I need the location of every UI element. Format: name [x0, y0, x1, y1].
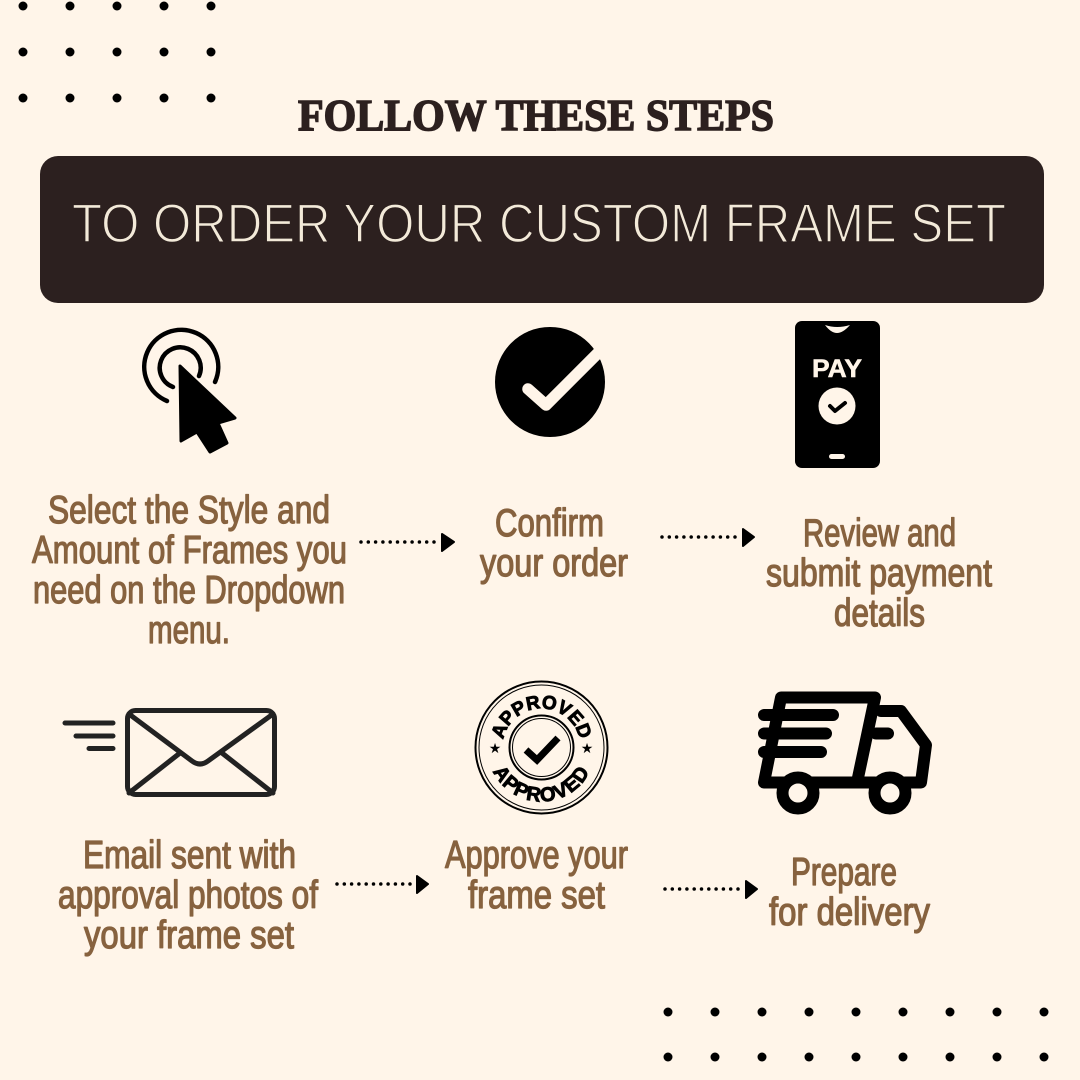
- icon: phone pay: PAY: [812, 355, 862, 383]
- icon: phone pay: [795, 321, 880, 468]
- text: step 6: [769, 851, 930, 934]
- text: step 6: Prepare: [791, 851, 897, 894]
- text: step 3: Review and: [803, 512, 956, 555]
- text: step 5: Approve your: [445, 834, 628, 877]
- icon: email envelope: [65, 710, 274, 794]
- text: step 2: [480, 502, 628, 585]
- text: step 1: [32, 489, 347, 652]
- text: step 2: Confirm: [495, 502, 604, 545]
- icon: cursor click: [144, 330, 235, 452]
- text: step 3: details: [834, 592, 925, 635]
- arrow: step 2 to 3: [662, 529, 754, 546]
- text: step 3: [766, 512, 992, 635]
- text: step 5: frame set: [468, 874, 605, 917]
- arrow: step 1 to 2: [361, 534, 454, 551]
- title: FOLLOW THESE STEPS: [298, 91, 774, 140]
- icon: approved stamp: ★: [489, 741, 501, 757]
- icon: delivery truck: [764, 698, 926, 808]
- text: step 2: your order: [480, 542, 628, 585]
- text: step 1: menu.: [148, 609, 230, 652]
- icon: approved stamp: APPROVED: [492, 695, 591, 740]
- arrow: step 5 to 6: [665, 881, 757, 898]
- text: step 1: need on the Dropdown: [33, 569, 345, 612]
- icon: approved stamp: ★: [581, 741, 593, 757]
- text: step 4: [58, 834, 318, 957]
- text: step 5: [445, 834, 628, 917]
- text: step 1: Amount of Frames you: [32, 529, 347, 572]
- banner: [40, 156, 1044, 303]
- text: step 3: submit payment: [766, 552, 992, 595]
- arrow: step 4 to 5: [337, 876, 428, 893]
- icon: check circle: [495, 327, 605, 437]
- text: step 1: Select the Style and: [48, 489, 330, 532]
- icon: approved stamp: APPROVED: [492, 767, 588, 802]
- text: step 4: approval photos of: [58, 874, 318, 917]
- text: step 4: Email sent with: [83, 834, 296, 877]
- text: step 4: your frame set: [84, 914, 294, 957]
- icon: approved stamp: [474, 680, 608, 814]
- text: step 6: for delivery: [769, 891, 930, 934]
